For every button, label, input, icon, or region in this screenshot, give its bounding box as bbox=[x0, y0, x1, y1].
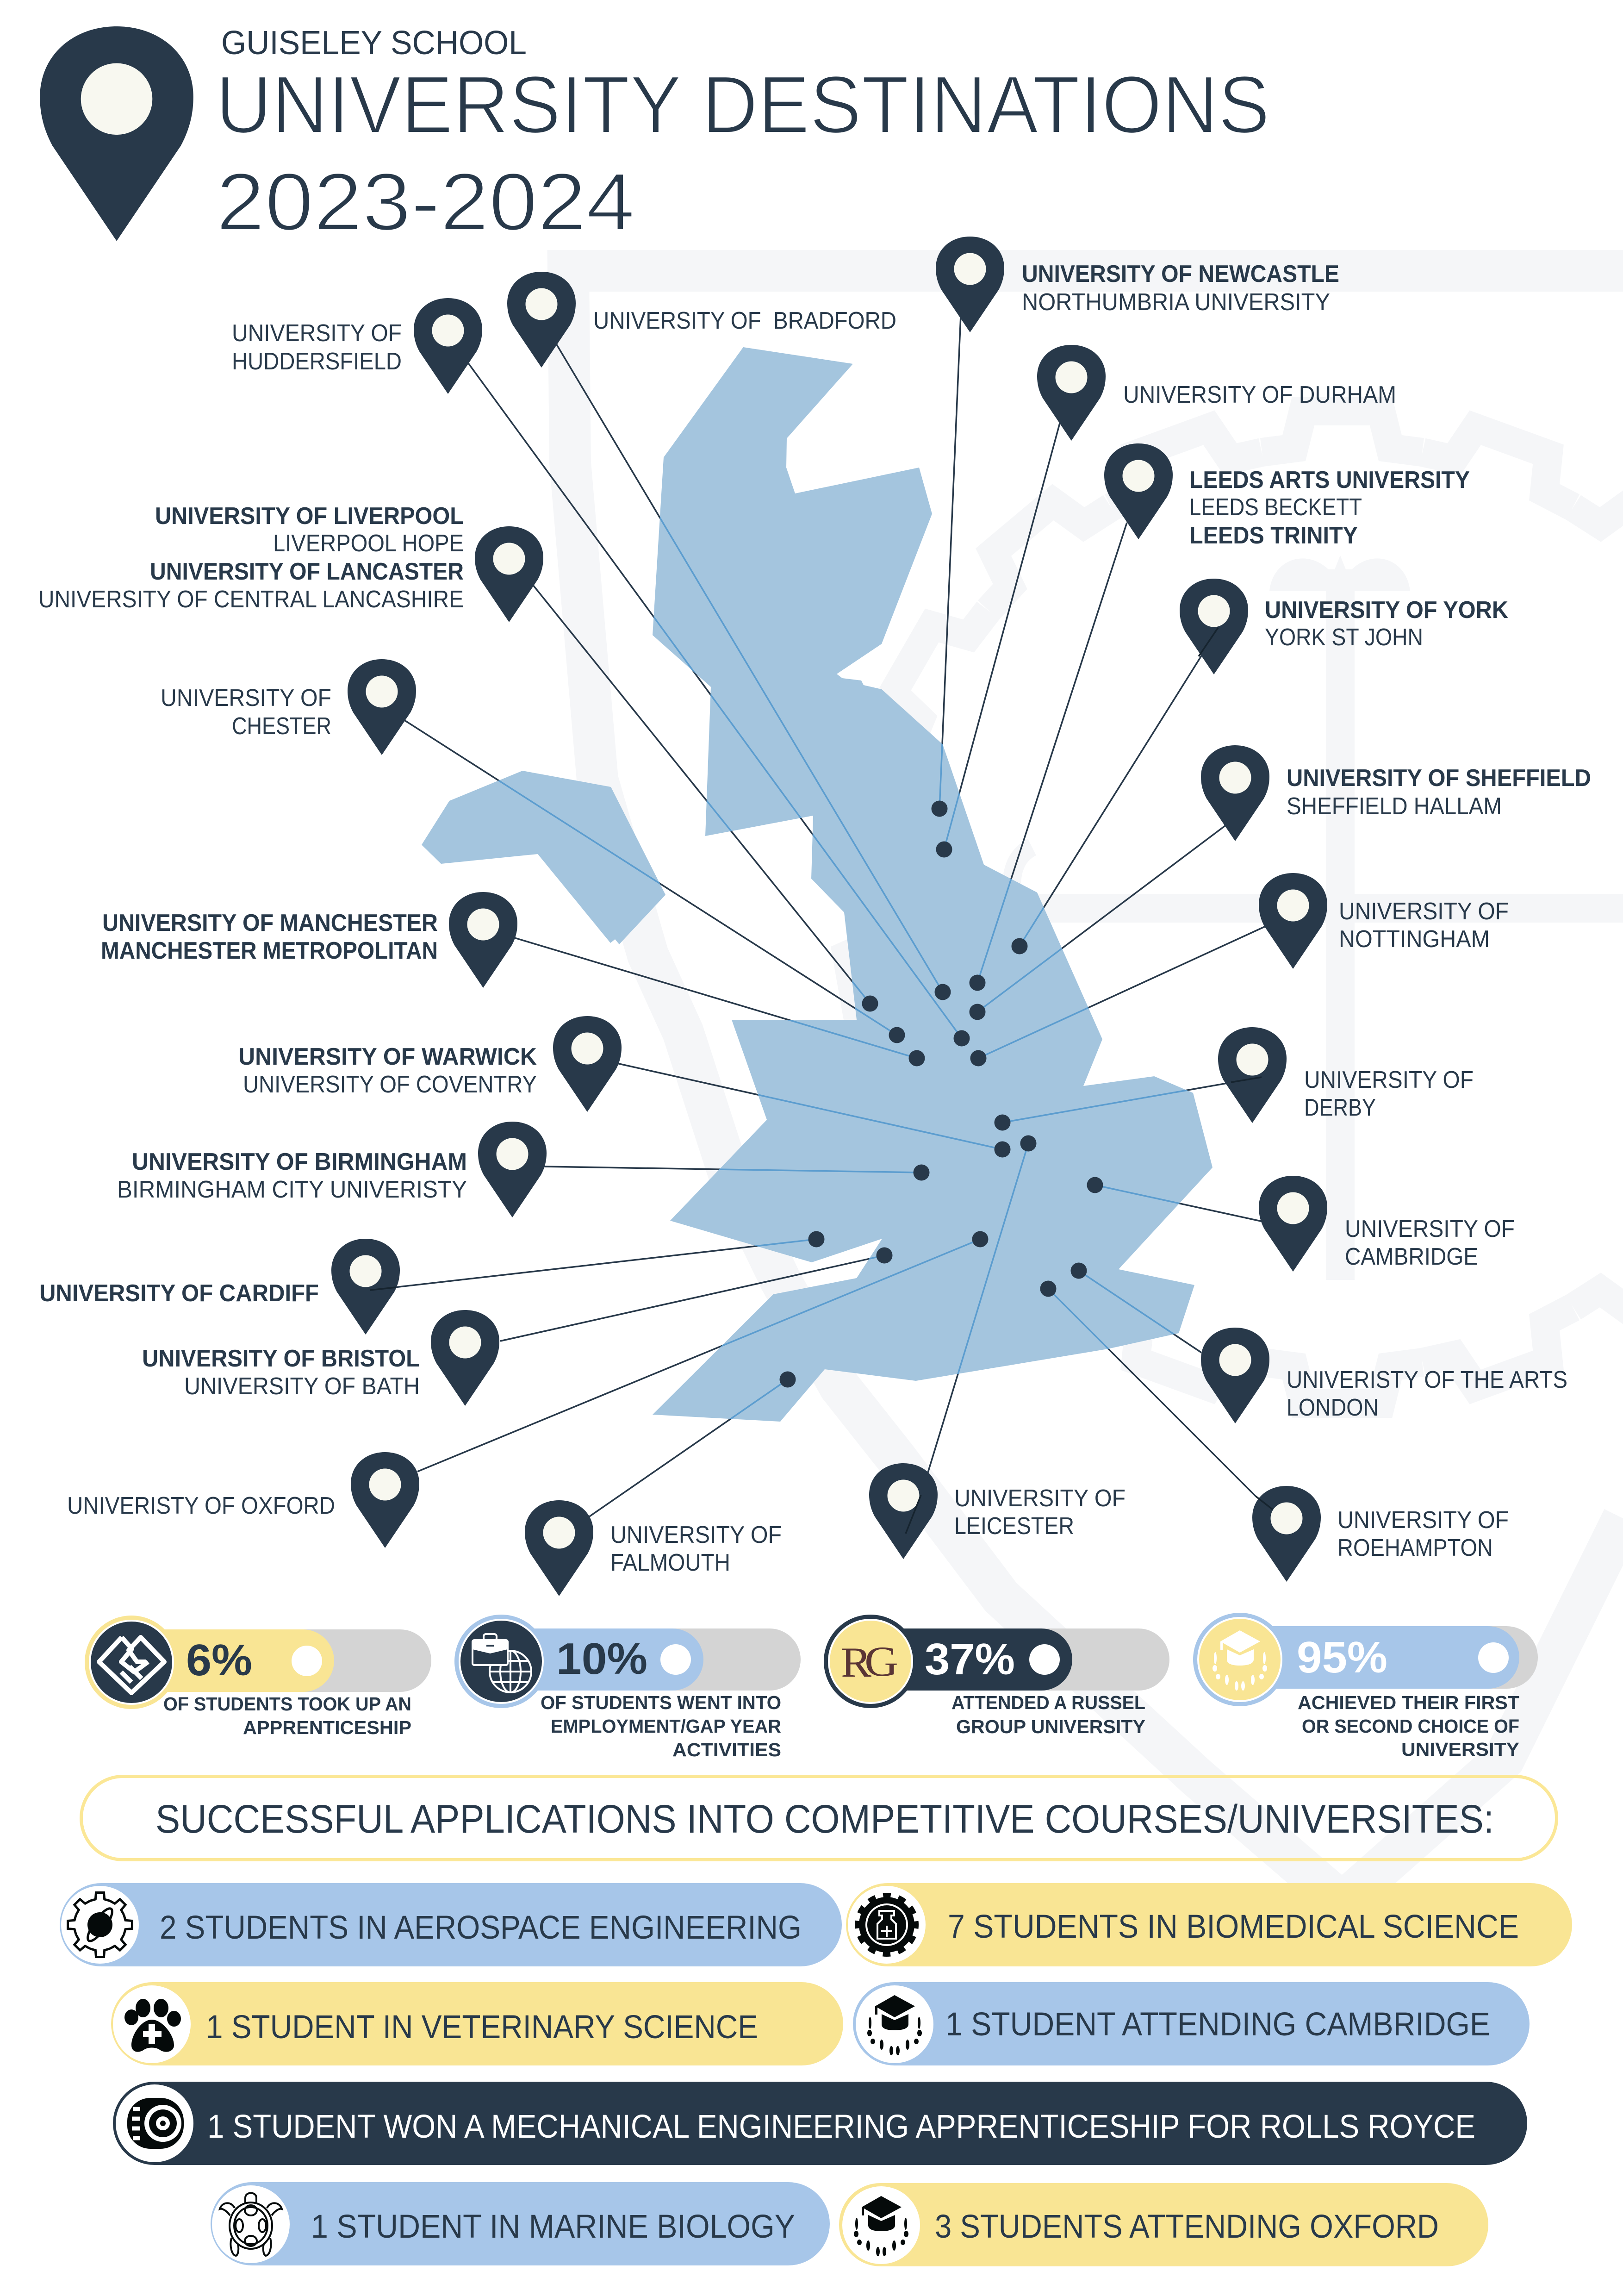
label: Liverpool and Lancaster bbox=[38, 503, 464, 613]
map: Northern Ireland bbox=[422, 771, 665, 944]
stat: 10% employment or gap year: OF STUDENTS WENT INTO bbox=[541, 1692, 781, 1713]
label: Sheffield: SHEFFIELD HALLAM bbox=[1287, 793, 1502, 820]
label: Nottingham: UNIVERSITY OF bbox=[1339, 898, 1509, 925]
label: York: UNIVERSITY OF YORK bbox=[1265, 597, 1508, 624]
connector lines from pins to map dots (outside map) bbox=[370, 315, 1268, 1554]
label: Bristol: UNIVERSITY OF BRISTOL bbox=[142, 1345, 420, 1372]
label: Birmingham: BIRMINGHAM CITY UNIVERISTY bbox=[117, 1176, 467, 1203]
stat: 95% first or second choice bbox=[1193, 1613, 1538, 1760]
title block: GUISELEY SCHOOL bbox=[221, 25, 527, 62]
icon: briefcase and globe bbox=[473, 1634, 531, 1692]
label: Chester: CHESTER bbox=[232, 713, 331, 740]
label: Liverpool and Lancaster: UNIVERSITY OF LIVERPOOL bbox=[155, 503, 464, 530]
stat: 6% apprenticeship: 6% bbox=[186, 1635, 252, 1685]
title block: 2023-2024 bbox=[216, 156, 635, 248]
label: Roehampton bbox=[1337, 1507, 1509, 1561]
icon: graduation cap bbox=[854, 2196, 908, 2256]
label: Warwick bbox=[238, 1043, 537, 1098]
label: Liverpool and Lancaster: LIVERPOOL HOPE bbox=[273, 530, 464, 557]
label: Leeds: LEEDS TRINITY bbox=[1189, 522, 1358, 549]
stat: 10% employment or gap year: 10% bbox=[556, 1634, 647, 1684]
label: Warwick: UNIVERSITY OF WARWICK bbox=[238, 1043, 537, 1070]
label: Cambridge: UNIVERSITY OF bbox=[1345, 1216, 1515, 1242]
label: Nottingham: NOTTINGHAM bbox=[1339, 926, 1490, 953]
pill: attending Cambridge: 1 STUDENT ATTENDING CAMBRIDGE bbox=[945, 2006, 1490, 2043]
stat: 10% employment or gap year bbox=[454, 1615, 801, 1760]
stat: 37% Russell Group: GROUP UNIVERSITY bbox=[956, 1716, 1145, 1737]
icon: gear with planet bbox=[68, 1892, 132, 1957]
label: Manchester: MANCHESTER METROPOLITAN bbox=[101, 937, 438, 964]
pill: attending Cambridge bbox=[853, 1982, 1530, 2065]
label: Sheffield: UNIVERSITY OF SHEFFIELD bbox=[1287, 765, 1591, 792]
map location dots bbox=[779, 801, 1103, 1388]
pill: aerospace engineering bbox=[60, 1883, 842, 1966]
pill: Rolls Royce apprenticeship: 1 STUDENT WON A MECHANICAL ENGINEERING APPRENTICESHIP FOR ROLLS ROYCE bbox=[207, 2109, 1475, 2145]
stat: 37% Russell Group: ATTENDED A RUSSEL bbox=[951, 1692, 1145, 1713]
pill: attending Oxford: 3 STUDENTS ATTENDING OXFORD bbox=[935, 2209, 1439, 2245]
label: Leeds bbox=[1189, 467, 1470, 549]
stat: 95% first or second choice: 95% bbox=[1297, 1633, 1387, 1682]
icon: handshake bbox=[99, 1637, 164, 1693]
label: Arts London: LONDON bbox=[1287, 1394, 1379, 1421]
label: Huddersfield: HUDDERSFIELD bbox=[232, 348, 402, 375]
label: Manchester bbox=[101, 910, 438, 964]
label: Sheffield bbox=[1287, 765, 1591, 820]
title block: UNIVERSITY DESTINATIONS bbox=[216, 59, 1270, 150]
label: Derby bbox=[1304, 1067, 1474, 1121]
pill: veterinary science bbox=[111, 1982, 843, 2065]
icon: gear with bottle bbox=[858, 1896, 915, 1953]
label: Huddersfield: UNIVERSITY OF bbox=[232, 320, 402, 347]
label: Chester: UNIVERSITY OF bbox=[161, 685, 331, 711]
label: Cardiff: UNIVERSITY OF CARDIFF bbox=[39, 1280, 319, 1307]
label: Leicester bbox=[954, 1485, 1126, 1540]
icon: mechanical wheel bbox=[127, 2098, 184, 2149]
connector lines over the map (blue) bbox=[498, 516, 1188, 1419]
label: Falmouth: UNIVERSITY OF bbox=[610, 1522, 782, 1548]
label: Leicester: UNIVERSITY OF bbox=[954, 1485, 1126, 1512]
pill: Rolls Royce apprenticeship bbox=[113, 2082, 1527, 2165]
icon: graduation cap bbox=[867, 1995, 922, 2055]
label: Manchester: UNIVERSITY OF MANCHESTER bbox=[102, 910, 438, 936]
label: York: YORK ST JOHN bbox=[1265, 624, 1423, 651]
location pins bbox=[331, 237, 1327, 1596]
icon: RG logo: G bbox=[864, 1638, 898, 1685]
label: Chester bbox=[161, 685, 331, 740]
label: Durham: UNIVERSITY OF DURHAM bbox=[1123, 381, 1396, 408]
label: Cambridge bbox=[1345, 1216, 1515, 1270]
label: Leicester: LEICESTER bbox=[954, 1513, 1074, 1540]
label: Oxford: UNIVERISTY OF OXFORD bbox=[67, 1492, 335, 1519]
pill: biomedical science: 7 STUDENTS IN BIOMEDICAL SCIENCE bbox=[948, 1909, 1519, 1945]
title block bbox=[216, 25, 1270, 248]
pill: attending Oxford bbox=[839, 2183, 1488, 2266]
stat: 6% apprenticeship bbox=[85, 1616, 431, 1738]
pill: marine biology bbox=[211, 2182, 830, 2265]
stat: 6% apprenticeship: APPRENTICESHIP bbox=[243, 1717, 411, 1738]
label: Falmouth bbox=[610, 1522, 782, 1576]
label: Bristol bbox=[142, 1345, 420, 1400]
icon: RG logo: R bbox=[841, 1639, 872, 1686]
pill: biomedical science bbox=[846, 1883, 1572, 1966]
label: York bbox=[1265, 597, 1508, 651]
label: Roehampton: UNIVERSITY OF bbox=[1337, 1507, 1509, 1534]
stat: 37% Russell Group: 37% bbox=[925, 1635, 1015, 1684]
stat: 10% employment or gap year: ACTIVITIES bbox=[672, 1739, 781, 1760]
label: Arts London bbox=[1287, 1366, 1567, 1421]
map of the UK bbox=[422, 347, 1213, 1422]
icon: graduation cap, white bbox=[1213, 1630, 1267, 1691]
header pin icon bbox=[40, 26, 193, 241]
icon: RG logo bbox=[841, 1638, 898, 1686]
pill: aerospace engineering: 2 STUDENTS IN AEROSPACE ENGINEERING bbox=[160, 1909, 802, 1946]
label: Warwick: UNIVERSITY OF COVENTRY bbox=[243, 1071, 537, 1098]
label: Arts London: UNIVERISTY OF THE ARTS bbox=[1287, 1366, 1567, 1393]
icon: paw with cross bbox=[124, 1999, 181, 2052]
map: Great Britain bbox=[653, 347, 1213, 1422]
label: Cambridge: CAMBRIDGE bbox=[1345, 1243, 1478, 1270]
watermark: school crest shield and gear bbox=[568, 271, 1623, 1903]
stat: 37% Russell Group bbox=[824, 1615, 1169, 1737]
label: Newcastle: NORTHUMBRIA UNIVERSITY bbox=[1022, 289, 1330, 316]
label: Liverpool and Lancaster: UNIVERSITY OF LANCASTER bbox=[150, 558, 464, 585]
label: Bradford: UNIVERSITY OF BRADFORD bbox=[593, 307, 896, 334]
label: Bristol: UNIVERSITY OF BATH bbox=[184, 1373, 420, 1400]
label: Liverpool and Lancaster: UNIVERSITY OF CENTRAL LANCASHIRE bbox=[38, 586, 464, 613]
label: Birmingham bbox=[117, 1148, 467, 1203]
label: Derby: DERBY bbox=[1304, 1094, 1376, 1121]
label: Roehampton: ROEHAMPTON bbox=[1337, 1535, 1493, 1561]
label: Leeds: LEEDS ARTS UNIVERSITY bbox=[1189, 467, 1470, 493]
label: Nottingham bbox=[1339, 898, 1509, 953]
pill: marine biology: 1 STUDENT IN MARINE BIOLOGY bbox=[311, 2209, 795, 2245]
heading: successful applications: SUCCESSFUL APPLICATIONS INTO COMPETITIVE COURSES/UNIVERSITES: bbox=[155, 1797, 1494, 1841]
label: Newcastle bbox=[1022, 261, 1339, 316]
heading: successful applications bbox=[81, 1777, 1557, 1860]
stat: 95% first or second choice: ACHIEVED THEIR FIRST bbox=[1298, 1692, 1519, 1713]
label: Leeds: LEEDS BECKETT bbox=[1189, 494, 1362, 521]
icon: turtle bbox=[220, 2193, 282, 2256]
stat: 6% apprenticeship: OF STUDENTS TOOK UP AN bbox=[163, 1693, 411, 1715]
stat: 95% first or second choice: OR SECOND CHOICE OF bbox=[1302, 1716, 1519, 1737]
label: Birmingham: UNIVERSITY OF BIRMINGHAM bbox=[132, 1148, 467, 1175]
label: Newcastle: UNIVERSITY OF NEWCASTLE bbox=[1022, 261, 1339, 287]
label: Falmouth: FALMOUTH bbox=[610, 1549, 730, 1576]
stat: 95% first or second choice: UNIVERSITY bbox=[1401, 1739, 1519, 1760]
label: Derby: UNIVERSITY OF bbox=[1304, 1067, 1474, 1093]
pill: veterinary science: 1 STUDENT IN VETERINARY SCIENCE bbox=[206, 2009, 758, 2046]
label: Huddersfield bbox=[232, 320, 402, 375]
stat: 10% employment or gap year: EMPLOYMENT/GAP YEAR bbox=[551, 1716, 781, 1737]
